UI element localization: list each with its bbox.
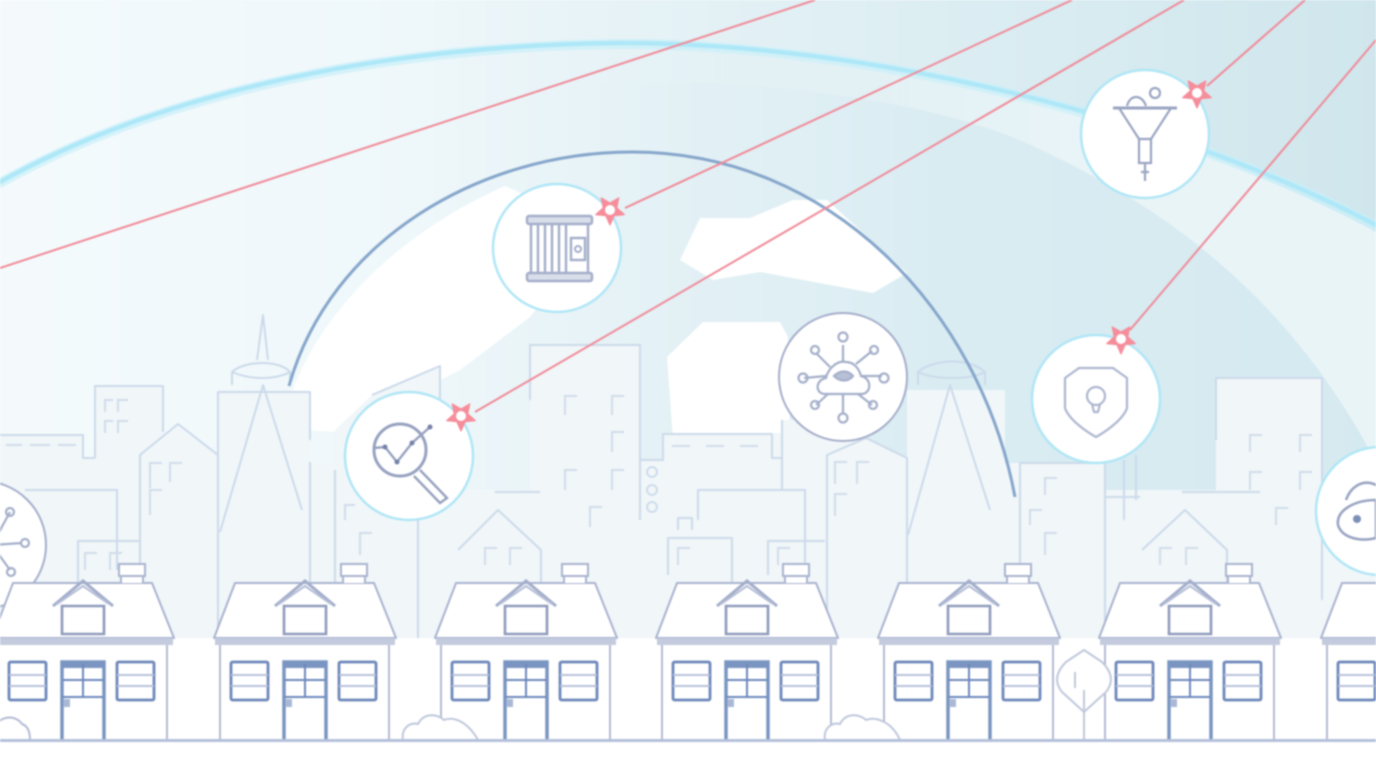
house 1 [0,564,174,741]
icon: network node at left edge [0,481,46,609]
icon: funnel [1081,70,1209,198]
icon: prison cell [493,184,621,312]
city skyline [0,315,1376,640]
red attack line 1 [0,0,815,268]
house 5 [878,564,1060,741]
red attack line 3 [475,0,1184,412]
icon: padlock at right edge [1316,447,1376,575]
house 4 [656,564,838,741]
icon: magnifier with chart [345,392,473,520]
shrub centre-right [825,715,900,740]
red attack line 5 [1130,40,1376,330]
ground line [0,739,1376,742]
protective dome arc [289,152,1015,497]
threat star 1 [596,198,624,225]
house 3 [435,564,617,741]
dots on narrow tower [647,467,657,512]
red attack line 4 [1207,0,1305,86]
icon: shield with keyhole [1032,335,1160,463]
building outlines [0,315,1322,640]
threat star 3 [1183,81,1211,108]
threat star 4 [1107,327,1135,354]
inner dome shading [0,82,1376,640]
house 2 [214,564,396,741]
shrub centre-left [403,715,478,740]
shrub left [0,718,30,740]
tree [1057,650,1111,741]
row of houses [0,564,1376,741]
white sky patches inside the protective dome [292,186,907,440]
ground strip [0,638,1376,774]
glowing cyan arc [0,43,1376,226]
icon: cloud eye network [779,313,907,441]
threat star 2 [447,404,475,431]
house 6 [1099,564,1281,741]
building windows [6,396,1312,570]
red attack line 2 [625,0,1072,208]
building fills [0,345,1376,640]
outer light band under the arc [0,46,1376,470]
house 7 [1321,564,1376,741]
